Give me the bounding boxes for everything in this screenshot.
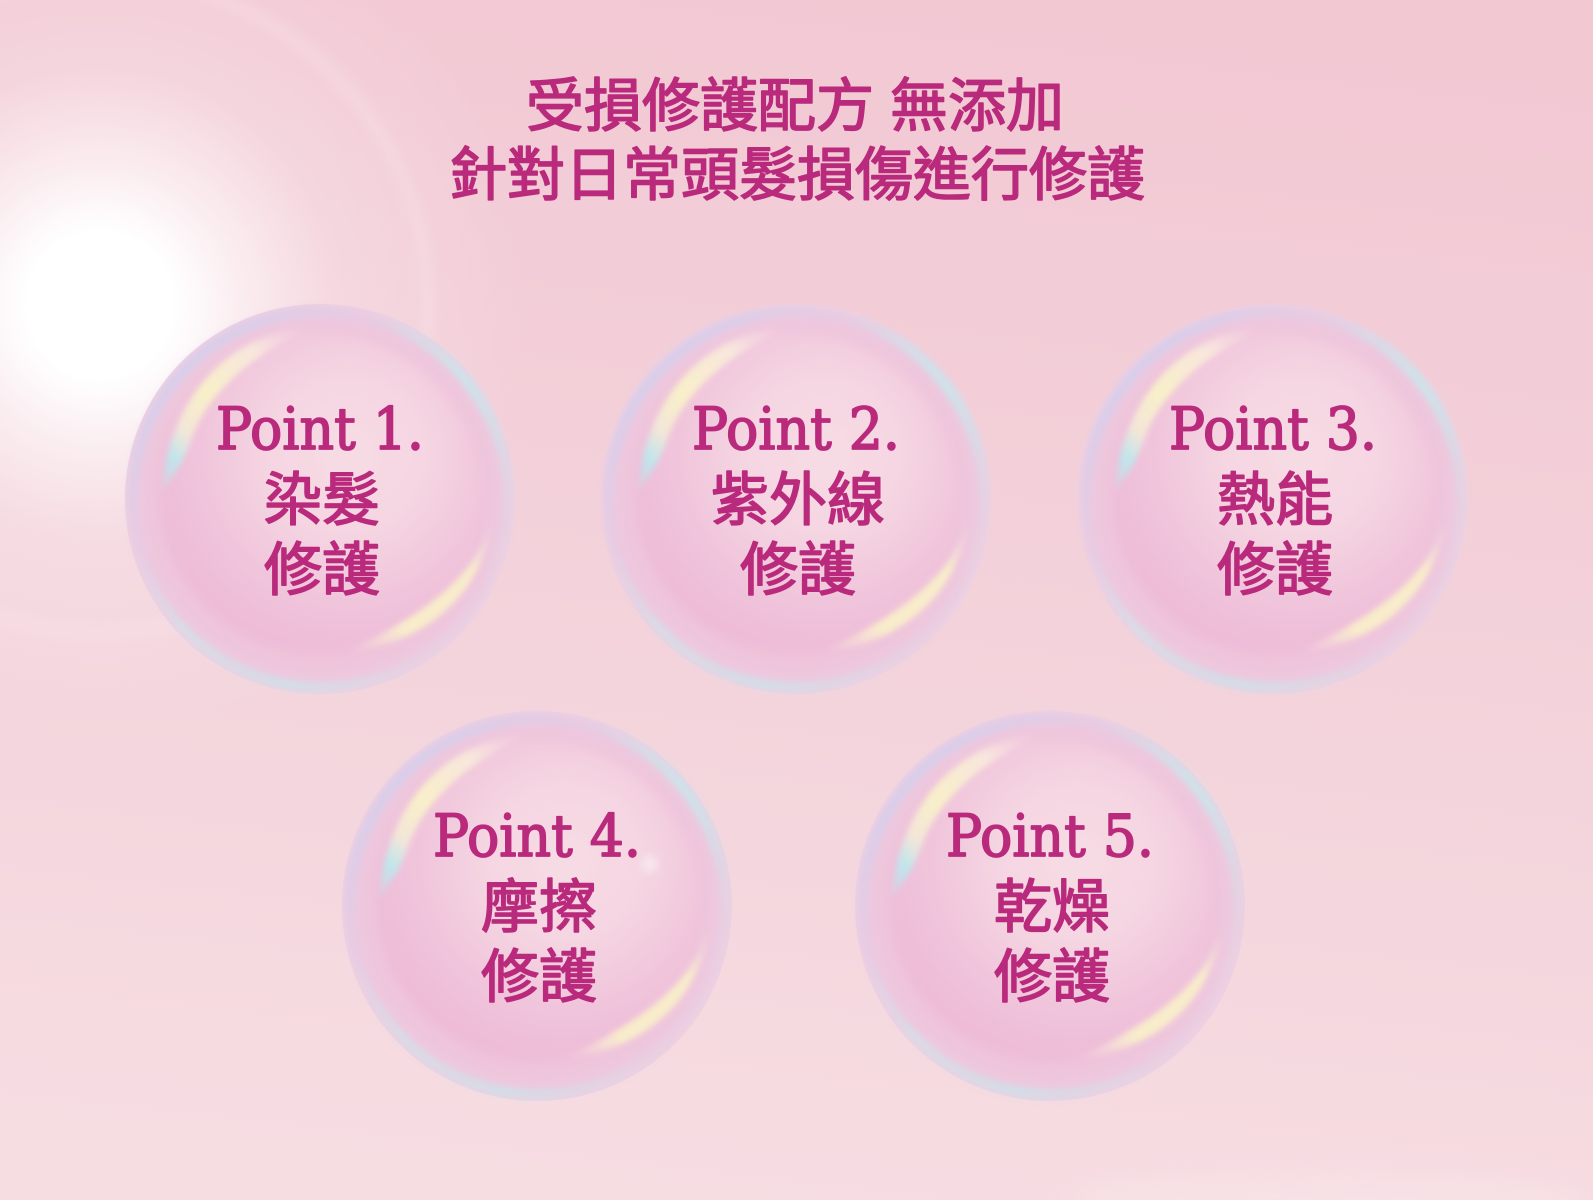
bubble: Point 4 (342, 711, 732, 1101)
title: 受損修護配方 無添加 (526, 74, 1064, 139)
bubble: Point 2: Point 2. (692, 395, 900, 463)
bubble: Point 3 (1078, 304, 1468, 694)
bubble: Point 2 (601, 304, 991, 694)
bubble: Point 1: Point 1. (216, 395, 424, 463)
bubble: Point 4: Point 4. (433, 802, 641, 870)
bubble: Point 4: 修護 (481, 945, 597, 1010)
bubble: Point 2: 紫外線 (711, 468, 885, 533)
bubble: Point 3: 修護 (1217, 538, 1333, 603)
bubble: Point 1: 染髮 (264, 468, 380, 533)
bubble: Point 2: 修護 (740, 538, 856, 603)
bubble: Point 4: 摩擦 (481, 875, 597, 940)
bubble: Point 3: Point 3. (1169, 395, 1377, 463)
bubble: Point 5: 修護 (994, 945, 1110, 1010)
bubble: Point 3: 熱能 (1217, 468, 1333, 533)
bubble: Point 1 (125, 304, 515, 694)
bubble: Point 5: 乾燥 (994, 875, 1110, 940)
title: 針對日常頭髮損傷進行修護 (449, 143, 1145, 208)
sparkle on bubble 4 (641, 855, 659, 873)
bubble: Point 5: Point 5. (946, 802, 1154, 870)
title (449, 74, 1145, 208)
bubble: Point 1: 修護 (264, 538, 380, 603)
bubble: Point 5 (855, 711, 1245, 1101)
